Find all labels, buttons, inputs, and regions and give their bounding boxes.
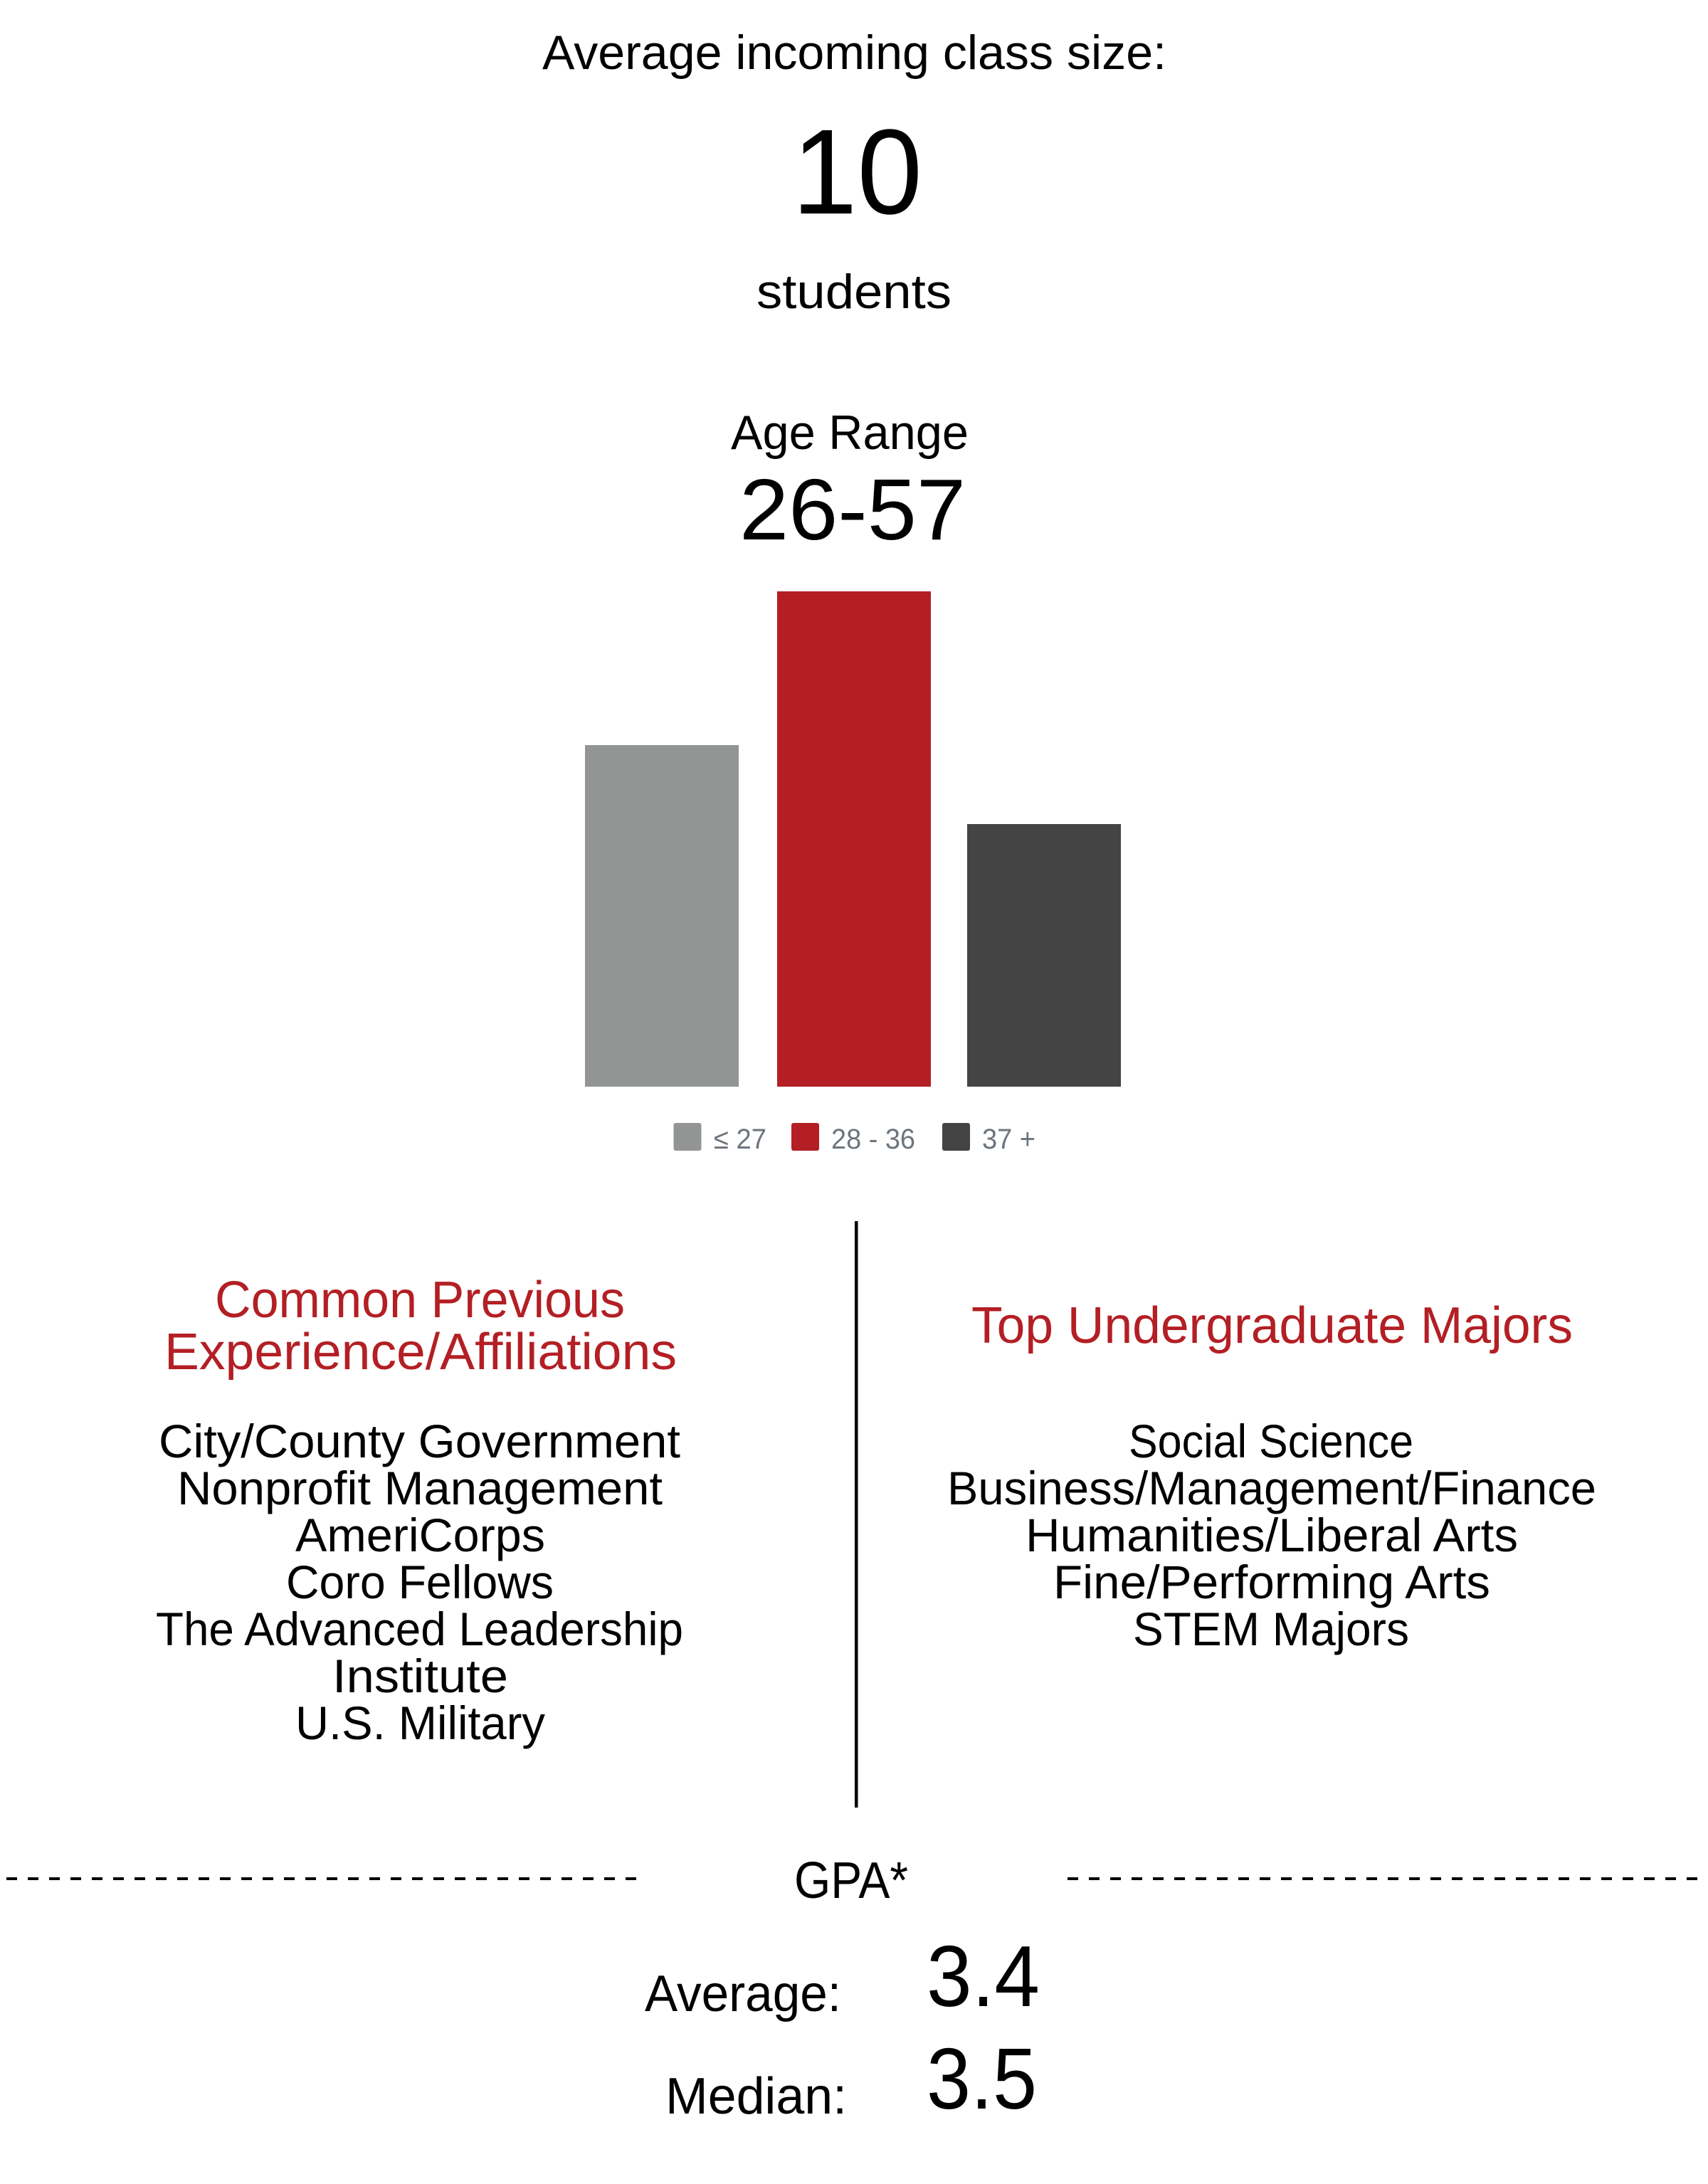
- chart legend: [673, 1123, 1035, 1155]
- vertical divider between panels: [855, 1221, 858, 1808]
- list: experience and affiliations: AmeriCorps: [295, 1509, 545, 1561]
- list: undergraduate majors: [947, 1415, 1596, 1655]
- big number: 10: 10: [792, 105, 922, 240]
- list: experience and affiliations: City/County Government: [159, 1415, 680, 1467]
- legend swatch: 28 to 36: [791, 1123, 819, 1151]
- heading: GPA: GPA*: [794, 1852, 908, 1909]
- panel: top undergraduate majors: [947, 1297, 1596, 1655]
- legend label: 27 and under: ≤ 27: [714, 1124, 766, 1155]
- list: undergraduate majors: Fine/Performing Arts: [1053, 1556, 1490, 1608]
- legend swatch: 27 and under: [673, 1123, 702, 1151]
- label: average GPA: Average:: [645, 1966, 841, 2022]
- list: experience and affiliations: [156, 1415, 683, 1749]
- panel heading: common previous experience: [164, 1272, 677, 1381]
- list: experience and affiliations: Institute: [332, 1650, 508, 1702]
- value: average GPA: 3.4: [927, 1928, 1040, 2025]
- panel heading: common previous experience: Common Previous: [215, 1272, 625, 1329]
- bar: 28 to 36: [777, 591, 931, 1087]
- legend label: 37 and over: 37 +: [982, 1124, 1035, 1155]
- bar: 27 and under: [585, 745, 739, 1087]
- bar: 37 and over: [967, 824, 1121, 1087]
- list: undergraduate majors: Humanities/Liberal Arts: [1026, 1509, 1518, 1561]
- big number: age range value: 26-57: [739, 461, 966, 558]
- list: undergraduate majors: STEM Majors: [1133, 1603, 1409, 1655]
- legend swatch: 37 and over: [942, 1123, 970, 1151]
- legend label: 28 to 36: 28 - 36: [831, 1124, 915, 1155]
- list: experience and affiliations: U.S. Military: [295, 1697, 545, 1749]
- list: experience and affiliations: Coro Fellows: [286, 1556, 554, 1608]
- heading: average incoming class size: Average incoming class size:: [542, 26, 1166, 80]
- value: median GPA: 3.5: [927, 2030, 1037, 2127]
- list: experience and affiliations: Nonprofit Management: [177, 1462, 663, 1514]
- heading: age range: Age Range: [731, 406, 969, 460]
- panel heading: top undergraduate majors: Top Undergraduate Majors: [971, 1297, 1573, 1354]
- label: students: students: [757, 265, 951, 319]
- panel: common previous experience: [156, 1272, 683, 1749]
- bar chart: age distribution: [585, 591, 1121, 1087]
- list: undergraduate majors: Social Science: [1129, 1415, 1413, 1467]
- list: experience and affiliations: The Advanced Leadership: [156, 1603, 683, 1655]
- label: median GPA: Median:: [665, 2068, 847, 2125]
- panel heading: common previous experience: Experience/Affiliations: [164, 1324, 677, 1381]
- list: undergraduate majors: Business/Management/Finance: [947, 1462, 1596, 1514]
